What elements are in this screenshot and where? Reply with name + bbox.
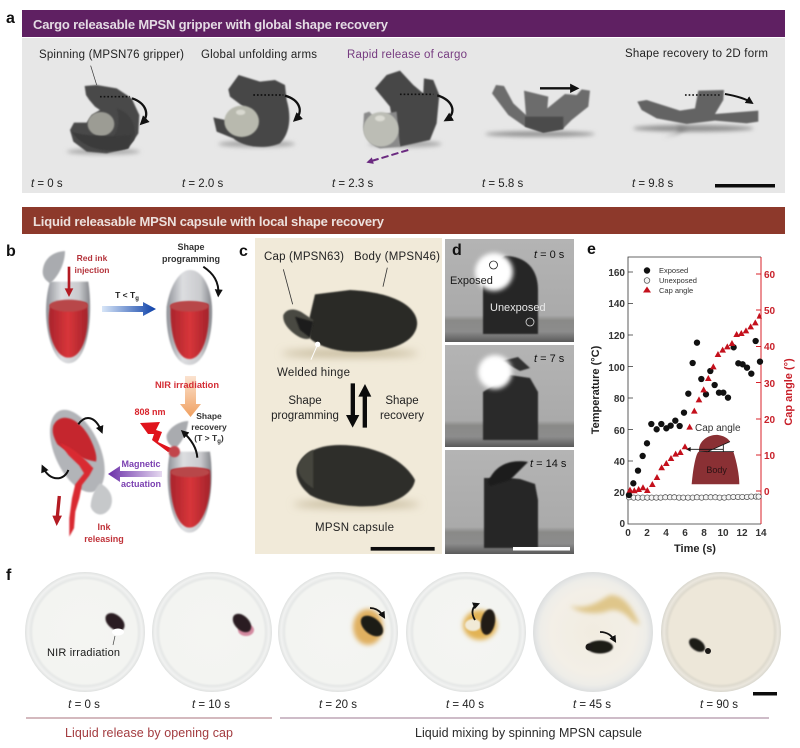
series: cap angle — [627, 313, 762, 493]
scale bar c — [371, 547, 435, 551]
bottom axis: time: 4 — [663, 528, 669, 539]
chart legend: Unexposed — [659, 276, 697, 285]
label: shape programming — [271, 395, 339, 422]
panel a: cargo releasable gripper — [22, 10, 785, 193]
plot frame — [628, 257, 761, 524]
text: shape programming: Shape — [177, 242, 205, 252]
photo strip background — [22, 38, 785, 193]
caption: shape recovery: Shape recovery to 2D form — [625, 48, 768, 60]
panel label a: a — [6, 10, 15, 27]
bottom axis: time — [625, 528, 767, 555]
text: ink releasing: releasing — [84, 534, 124, 544]
left axis: temperature: 80 — [614, 394, 625, 405]
time labels for panel a — [31, 178, 673, 190]
gripper frame t = 9.8 s — [633, 90, 758, 137]
panel b: capsule schematic — [39, 242, 227, 544]
label: cap and body: Cap (MPSN63) — [264, 251, 344, 263]
text: ink releasing: Ink — [97, 522, 111, 532]
text: 808 nm laser — [134, 407, 175, 452]
dish t = 0 s — [25, 572, 145, 692]
gripper frame t = 5.8 s — [485, 85, 595, 137]
text: shape programming: programming — [162, 254, 220, 264]
left axis: temperature: 40 — [614, 457, 625, 468]
inset: capsule body diagram — [686, 435, 739, 484]
right axis: cap angle: 40 — [764, 342, 776, 353]
chart legend — [643, 266, 697, 295]
left axis: temperature: 100 — [608, 363, 625, 374]
double arrows — [346, 383, 371, 428]
panel label c: c — [239, 243, 248, 260]
label: MPSN capsule: MPSN capsule — [315, 522, 394, 534]
panel c: capsule photographs — [255, 238, 442, 554]
time labels for panel f — [68, 699, 738, 711]
arrow: T below Tg: T < T — [115, 290, 135, 300]
dish t = 0 s: NIR irradiation — [47, 647, 120, 659]
panel d: thermal exposure frames — [445, 239, 574, 554]
caption: unfolding: Global unfolding arms — [201, 49, 317, 61]
left axis: temperature — [590, 268, 633, 530]
frame t = 0 s: Exposed — [450, 275, 493, 287]
dish t = 45 s — [533, 572, 653, 692]
bottom axis: time: 10 — [717, 528, 729, 539]
bottom axis: time: Time (s) — [674, 543, 716, 555]
gripper frame t = 2.0 s — [213, 75, 300, 147]
time labels for panel f: t = 20 s — [319, 699, 357, 711]
photo background — [255, 238, 442, 554]
bottom axis: time: 12 — [736, 528, 748, 539]
bottom axis: time: 6 — [682, 528, 688, 539]
frame t = 7 s — [445, 345, 574, 447]
arrow: T below Tg — [102, 290, 156, 316]
text: red ink injection: Red ink — [77, 253, 108, 263]
arrow: NIR irradiation — [155, 376, 219, 417]
label: shape recovery: recovery — [380, 410, 424, 422]
right axis: cap angle: 50 — [764, 306, 776, 317]
dish t = 90 s — [661, 572, 781, 692]
panel label f: f — [6, 567, 12, 584]
right axis: cap angle: 20 — [764, 415, 776, 426]
annotation: cap angle: Cap angle — [695, 423, 741, 434]
chart legend: Cap angle — [659, 286, 693, 295]
time labels for panel f: t = 0 s — [68, 699, 100, 711]
frame t = 14 s: t = 14 s — [530, 458, 567, 470]
bottom axis: time: 14 — [755, 528, 767, 539]
right axis: cap angle — [756, 270, 795, 498]
capsule closed by shape programming — [166, 267, 218, 365]
label: welded hinge: Welded hinge — [277, 367, 350, 379]
bracket: liquid release: Liquid release by opening cap — [65, 726, 233, 740]
panel f: liquid release dishes — [25, 572, 781, 740]
right axis: cap angle: 0 — [764, 487, 770, 498]
frame t = 0 s: t = 0 s — [534, 249, 565, 261]
text: 808 nm laser: 808 nm — [134, 407, 166, 417]
right axis: cap angle: 10 — [764, 451, 776, 462]
bracket: liquid mixing: Liquid mixing by spinning MPSN capsule — [415, 726, 642, 740]
left axis: temperature: 0 — [619, 519, 625, 530]
text: shape recovery above Tg: recovery — [191, 422, 227, 432]
arrow: magnetic actuation — [108, 459, 162, 489]
arrow: magnetic actuation: Magnetic — [121, 459, 161, 469]
time labels for panel f: t = 45 s — [573, 699, 611, 711]
bottom axis: time: 0 — [625, 528, 631, 539]
header bar: gripper — [22, 10, 785, 37]
time labels for panel a: t = 5.8 s — [482, 178, 523, 190]
header bar: capsule — [22, 207, 785, 234]
label: shape recovery — [380, 395, 424, 422]
right axis: cap angle: Cap angle (°) — [783, 358, 795, 426]
frame t = 0 s — [445, 239, 574, 342]
gripper frame t = 2.3 s with released ball — [363, 71, 452, 162]
time labels for panel f: t = 10 s — [192, 699, 230, 711]
scale bar a — [715, 184, 775, 188]
arrow: magnetic actuation: actuation — [121, 479, 161, 489]
chart legend: Exposed — [659, 266, 688, 275]
frame t = 14 s — [445, 450, 574, 554]
panel label b: b — [6, 243, 16, 260]
dish t = 10 s — [152, 572, 272, 692]
left axis: temperature: 20 — [614, 488, 625, 499]
text: shape recovery above Tg: (T > T — [194, 433, 217, 443]
inset: capsule body diagram: Body — [706, 465, 727, 475]
series: exposed temperature — [626, 338, 763, 498]
header bar: capsule: Liquid releasable MPSN capsule with local shape recovery — [33, 214, 385, 229]
text: red ink injection — [75, 253, 109, 275]
open capsule photograph — [282, 268, 418, 360]
text: shape recovery above Tg — [191, 411, 227, 445]
gripper frame t = 0 s — [67, 66, 146, 155]
time labels for panel a: t = 2.0 s — [182, 178, 223, 190]
label: shape programming: Shape — [288, 395, 322, 407]
label: cap and body: Body (MPSN46) — [354, 251, 440, 263]
tilted capsule releasing ink — [39, 402, 116, 537]
panel label e: e — [587, 241, 596, 258]
left axis: temperature: 120 — [608, 331, 625, 342]
time labels for panel a: t = 2.3 s — [332, 178, 373, 190]
bottom axis: time: 2 — [644, 528, 650, 539]
header bar: gripper: Cargo releasable MPSN gripper with global shape recovery — [33, 17, 389, 32]
bottom axis: time: 8 — [701, 528, 707, 539]
left axis: temperature: 60 — [614, 426, 625, 437]
dish t = 20 s — [278, 572, 398, 692]
capsule with open cap and ink injection — [43, 251, 90, 363]
series: unexposed temperature — [626, 494, 761, 500]
frame t = 7 s: t = 7 s — [534, 353, 565, 365]
caption: release of cargo: Rapid release of cargo — [347, 49, 467, 61]
left axis: temperature: Temperature (°C) — [590, 345, 602, 434]
label: shape programming: programming — [271, 410, 339, 422]
arrow: NIR irradiation: NIR irradiation — [155, 380, 219, 390]
caption: spinning gripper: Spinning (MPSN76 gripper) — [39, 49, 184, 61]
left axis: temperature: 160 — [608, 268, 625, 279]
frame t = 0 s: Unexposed — [490, 302, 546, 314]
closed capsule photograph — [293, 445, 420, 507]
text: shape recovery above Tg: ) — [221, 433, 224, 443]
text: ink releasing — [84, 522, 124, 544]
text: shape programming — [162, 242, 220, 264]
time labels for panel f: t = 90 s — [700, 699, 738, 711]
text: red ink injection: injection — [75, 265, 109, 275]
text: shape recovery above Tg: Shape — [196, 411, 222, 421]
capsule with recovering cap — [167, 421, 212, 533]
time labels for panel a: t = 0 s — [31, 178, 63, 190]
arrow: T below Tg: g — [135, 296, 139, 302]
scale bar f — [753, 692, 777, 696]
time labels for panel a: t = 9.8 s — [632, 178, 673, 190]
panel e: temperature and cap angle chart — [590, 257, 795, 555]
dish t = 40 s — [406, 572, 526, 692]
text: shape recovery above Tg: g — [217, 439, 221, 445]
right axis: cap angle: 30 — [764, 379, 776, 390]
left axis: temperature: 140 — [608, 299, 625, 310]
right axis: cap angle: 60 — [764, 270, 776, 281]
time labels for panel f: t = 40 s — [446, 699, 484, 711]
label: shape recovery: Shape — [385, 395, 419, 407]
panel label d: d — [452, 242, 462, 259]
label: cap and body — [264, 251, 440, 263]
